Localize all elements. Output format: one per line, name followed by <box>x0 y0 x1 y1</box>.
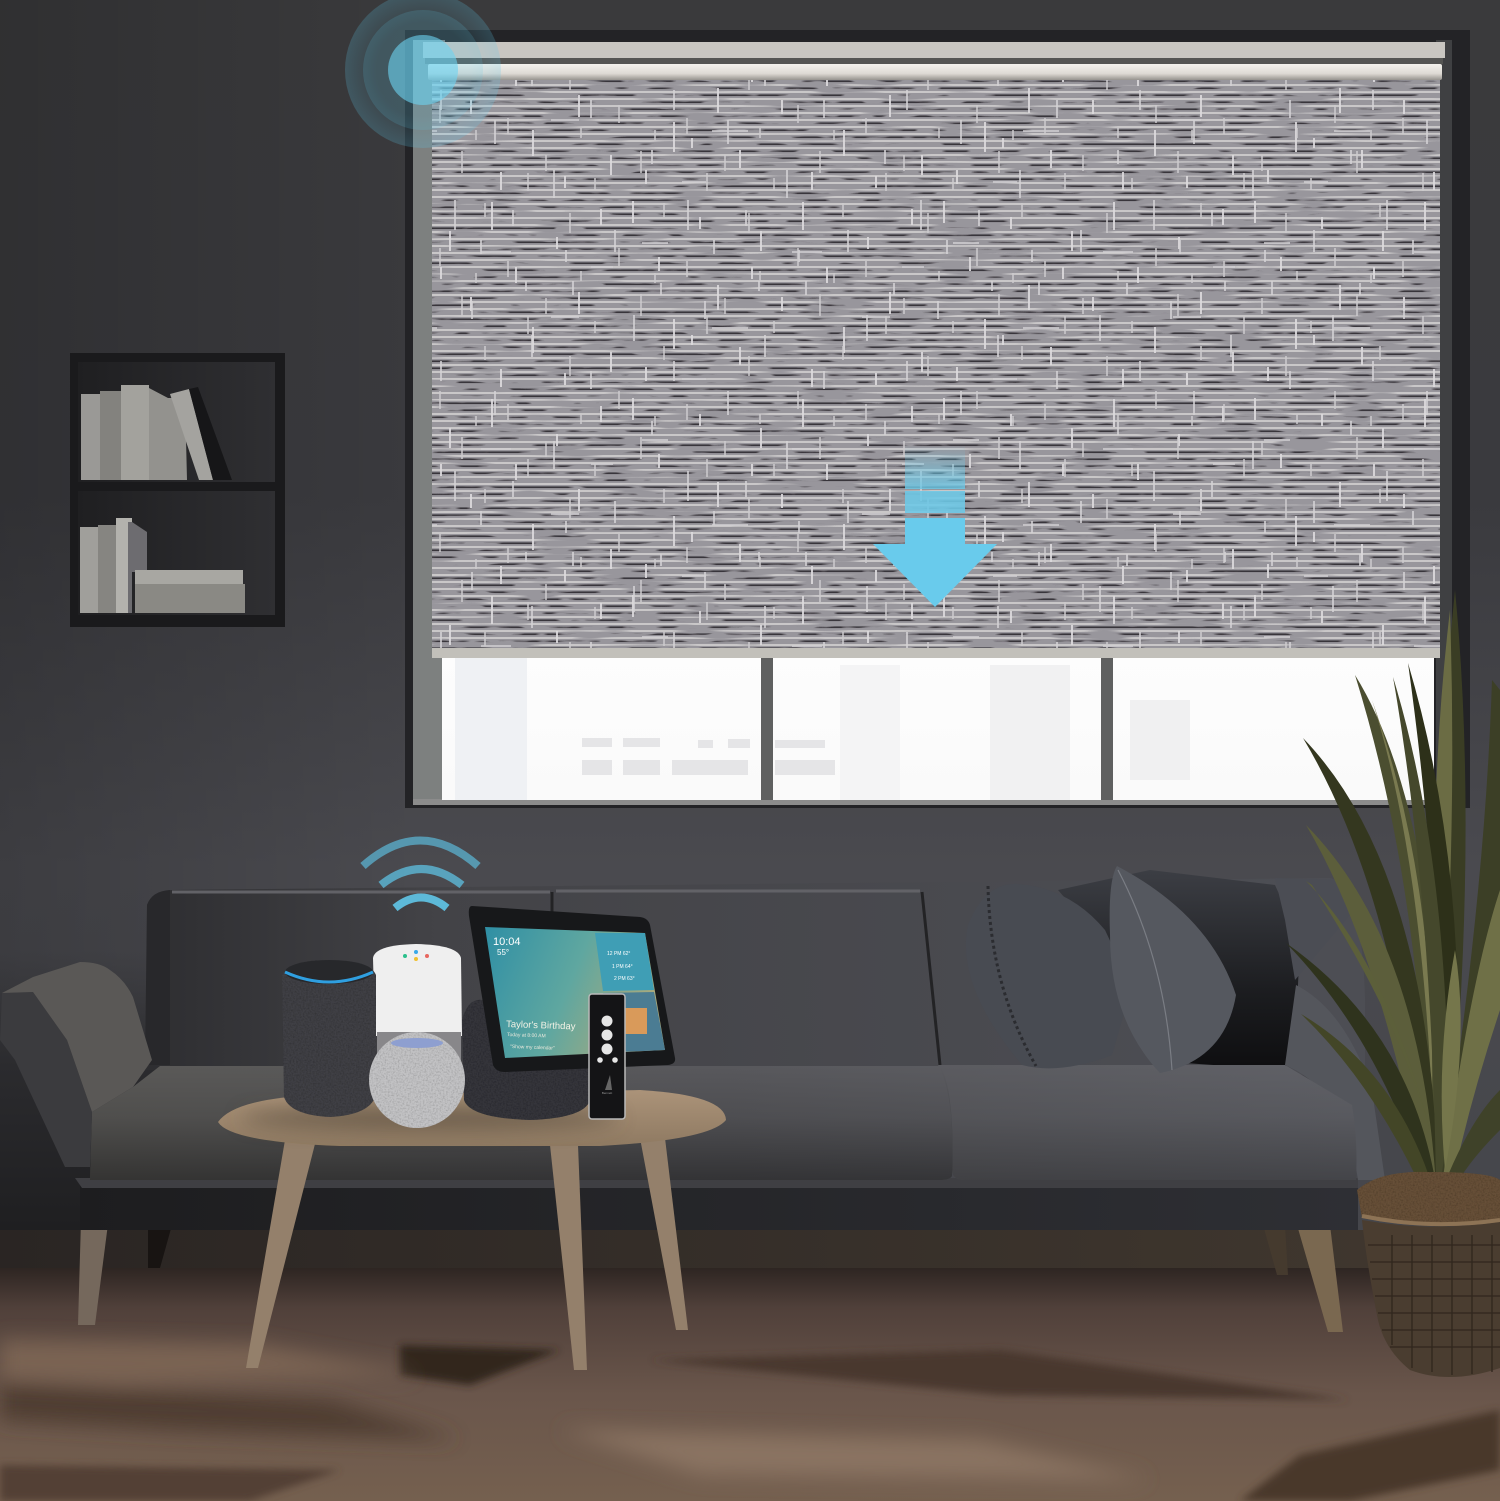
white smart speaker <box>373 944 462 1062</box>
smart display with stand: 55° <box>497 948 509 957</box>
down arrow <box>873 445 997 607</box>
smart display with stand <box>462 906 675 1120</box>
window frame <box>405 30 1470 808</box>
sofa <box>0 866 1385 1332</box>
sofa right arm <box>1285 985 1385 1180</box>
smart display with stand: 12 PM 62° <box>607 951 630 957</box>
books lower <box>80 518 245 613</box>
display screen <box>485 927 665 1058</box>
grey mini speaker <box>369 1032 465 1128</box>
window mullions <box>761 655 1113 800</box>
plant leaves <box>1286 590 1500 1185</box>
dark back pillow <box>1058 870 1300 1070</box>
woven basket pot <box>1362 1220 1500 1377</box>
window view below the shade <box>442 655 1434 800</box>
smart display with stand: 10:04 <box>493 936 521 948</box>
smart display with stand: "Show my calendar" <box>510 1044 555 1052</box>
sofa legs <box>78 1185 1343 1332</box>
floor <box>0 1265 1500 1501</box>
smart display with stand: Today at 8:00 AM <box>507 1032 546 1039</box>
table top <box>218 1090 726 1146</box>
sofa back <box>146 878 1365 1075</box>
coffee table <box>218 1090 726 1370</box>
shade bottom rail <box>432 648 1440 658</box>
sofa seat cushions <box>90 1066 952 1180</box>
sofa left arm <box>0 992 92 1167</box>
pillow left <box>966 884 1125 1068</box>
remote control: Bennett <box>602 1091 612 1095</box>
baseboard <box>0 1230 1500 1268</box>
wifi signal icon <box>363 840 478 908</box>
display body <box>469 906 675 1072</box>
potted plant <box>1286 590 1500 1377</box>
roller shade fabric <box>432 80 1440 648</box>
smart display with stand: 1 PM 64° <box>612 964 633 970</box>
sofa frame base <box>80 1180 1358 1230</box>
books upper <box>81 385 232 480</box>
pillow front <box>1110 866 1236 1073</box>
roller headrail <box>423 42 1445 80</box>
smart display with stand: Taylor's Birthday <box>506 1019 576 1032</box>
dark cylinder speaker <box>282 960 376 1117</box>
bookshelf <box>70 353 285 627</box>
signal pulse at motor <box>345 0 501 148</box>
remote control <box>589 994 625 1119</box>
display base <box>462 1000 600 1120</box>
smart display with stand: 2 PM 63° <box>614 976 635 982</box>
table legs <box>246 1138 688 1370</box>
